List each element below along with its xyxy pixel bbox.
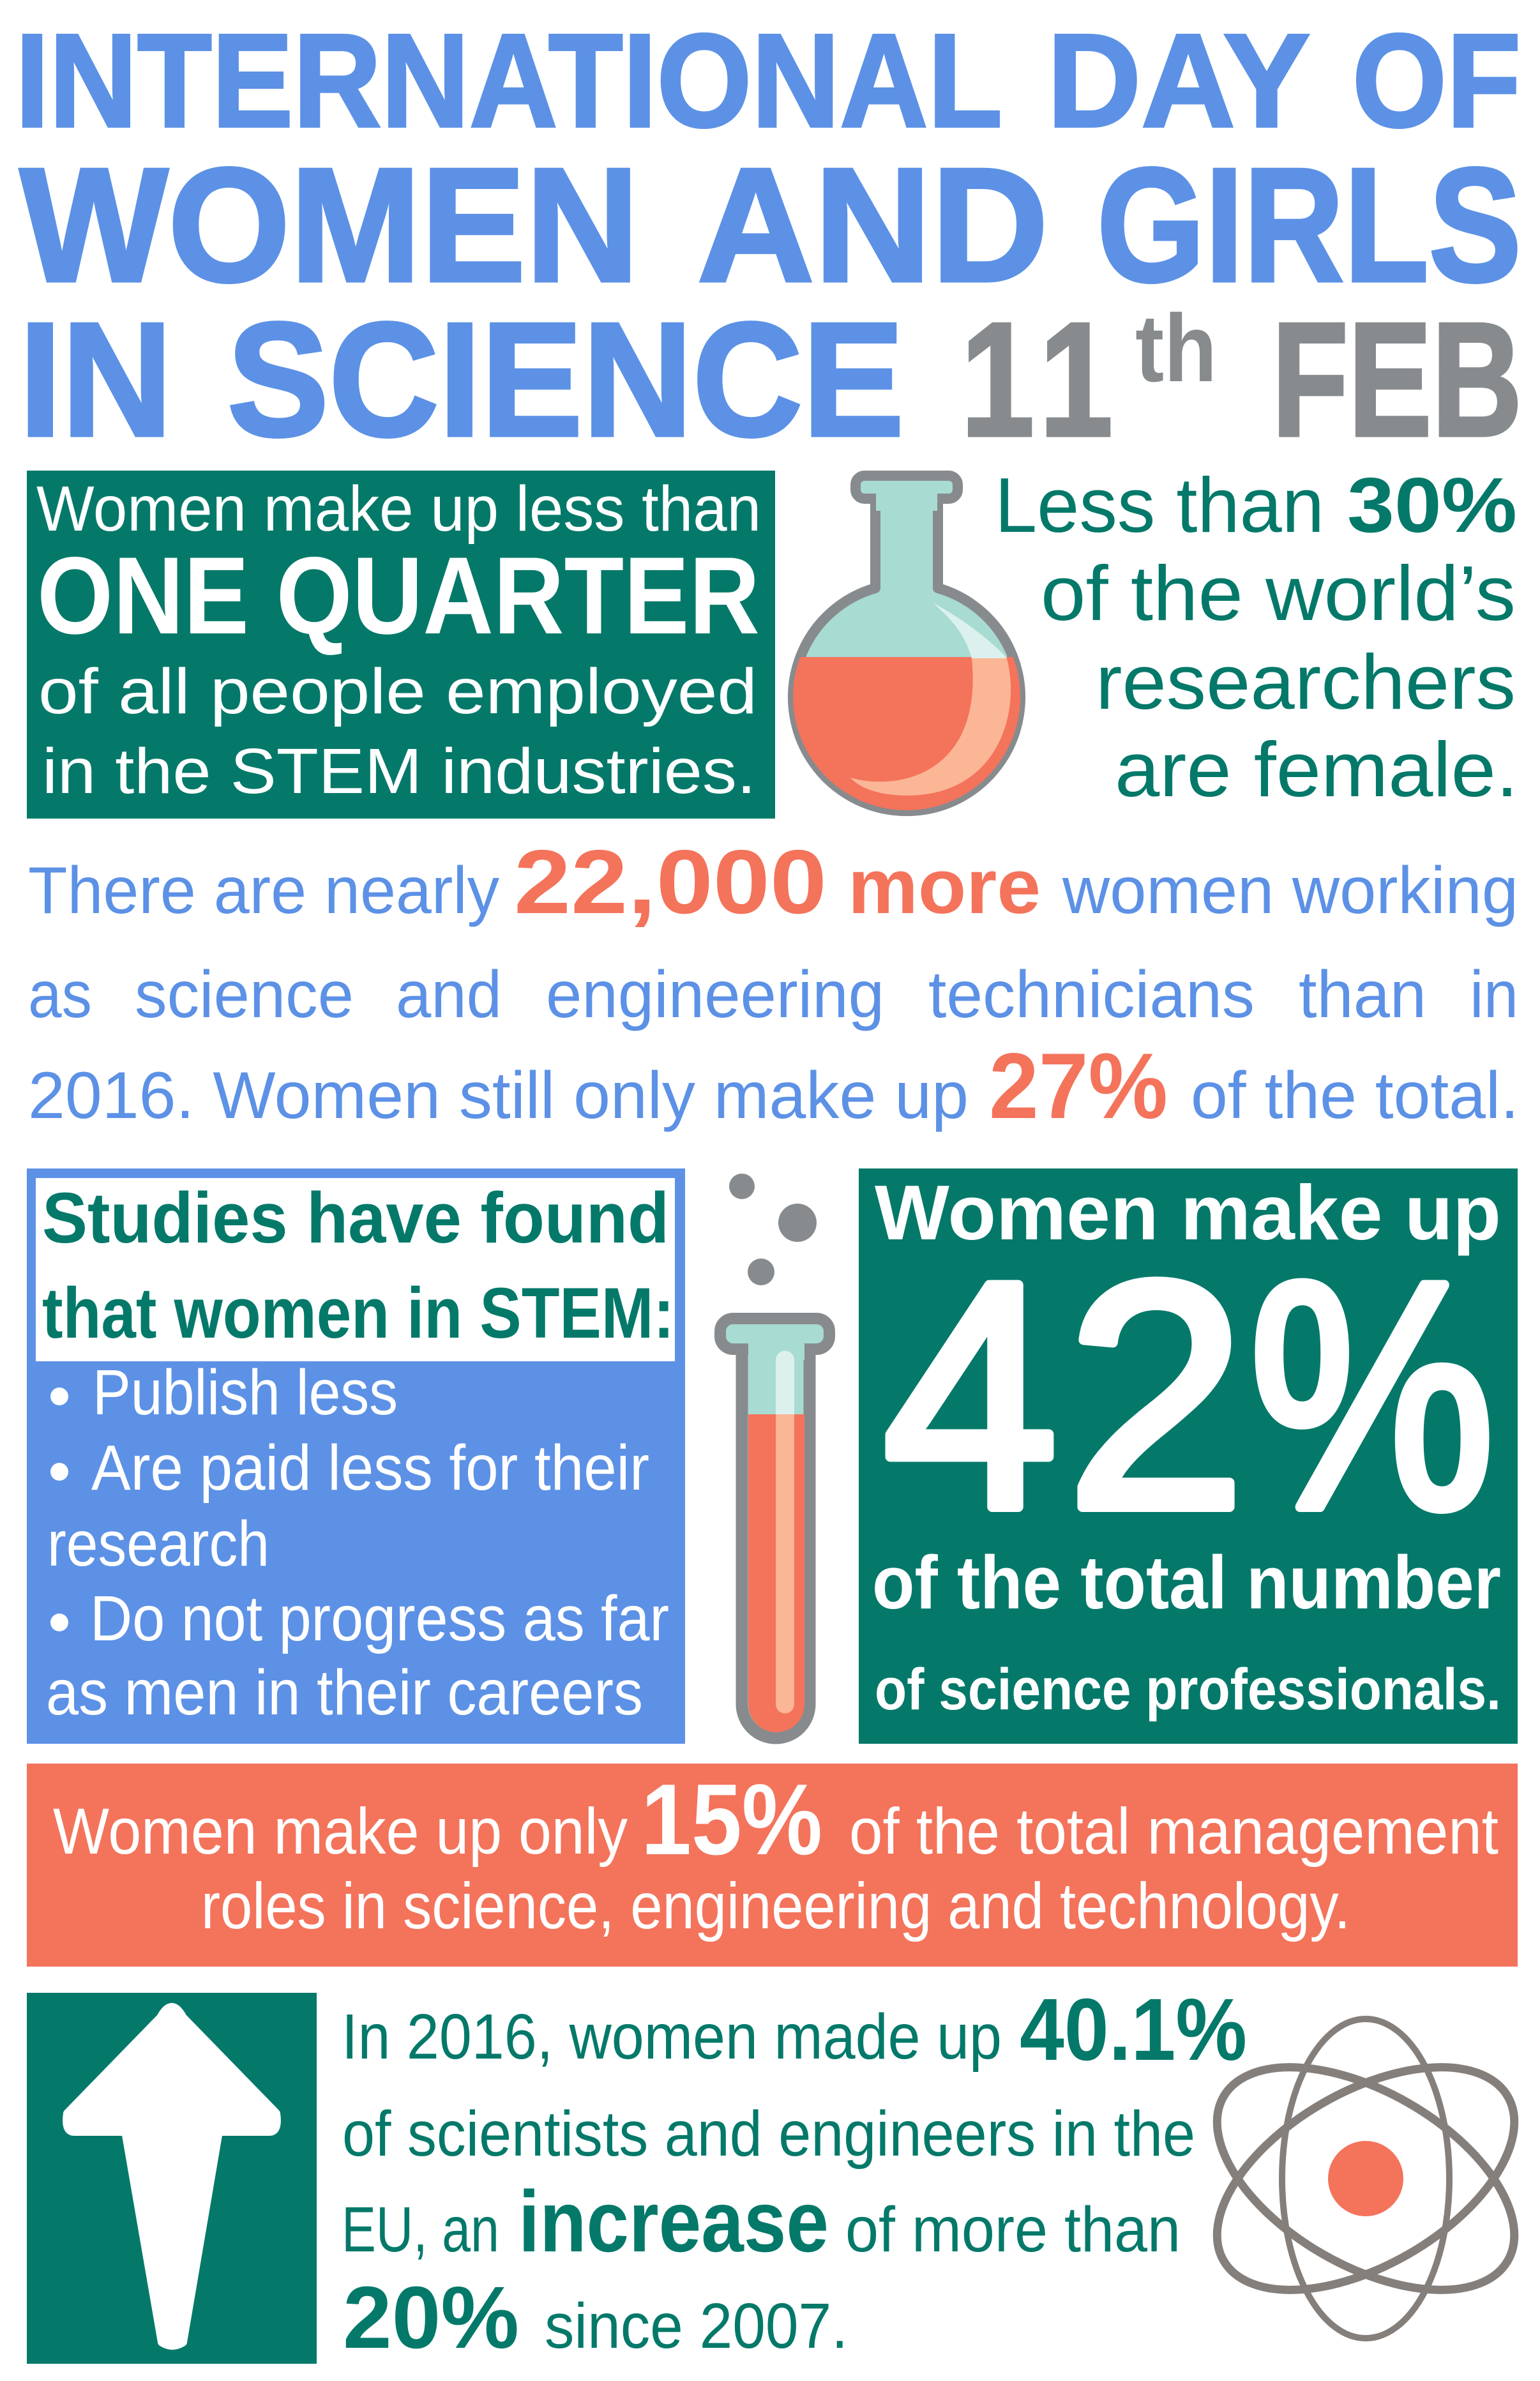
text: EU increase: In 2016, women made up — [342, 2001, 1002, 2073]
title: SCIENCE — [227, 289, 904, 470]
list: findings: Publish less — [93, 1357, 398, 1428]
text: 22,000 more technicians: 22,000 — [514, 831, 827, 933]
text: EU increase: 20% — [343, 2269, 519, 2367]
text: management statement: of the total management — [849, 1795, 1498, 1868]
text: EU increase: increase — [518, 2173, 829, 2270]
text: 22,000 more technicians: science — [135, 958, 354, 1032]
text: 22,000 more technicians: engineering — [546, 958, 884, 1032]
heading: studies — [42, 1178, 674, 1353]
icon: atom — [1180, 2019, 1540, 2338]
text: management statement: roles in science, engineering and technology. — [201, 1870, 1350, 1942]
title — [15, 7, 1521, 470]
date: 11th Feb: 1 — [961, 289, 1034, 470]
text: 22,000 more technicians: more — [848, 843, 1041, 930]
text: women make up 42% — [872, 1169, 1501, 1722]
title: WOMEN — [20, 134, 639, 315]
date: 11th Feb — [961, 289, 1522, 470]
date: 11th Feb: 1 — [1039, 289, 1113, 470]
text: EU increase: 40.1% — [1020, 1981, 1247, 2079]
panel: 42% — [859, 1168, 1518, 1744]
text: EU increase: since 2007. — [545, 2290, 848, 2362]
panel: studies have found — [27, 1168, 685, 1744]
text: women make up 42%: 2 — [1066, 1216, 1246, 1576]
text: 22,000 more technicians — [28, 831, 1519, 1138]
heading: studies: Studies have found — [42, 1178, 669, 1258]
text: less than 30% — [995, 462, 1518, 813]
title: DAY — [1047, 7, 1310, 155]
text: EU increase: of more than — [845, 2194, 1181, 2265]
text: women make up 42%: % — [1249, 1216, 1495, 1576]
text: EU increase: of scientists and engineers in the — [342, 2098, 1195, 2170]
text: 22,000 more technicians: as — [28, 958, 92, 1032]
text: management statement: Women make up only — [53, 1795, 628, 1868]
icon: up arrow — [67, 2007, 276, 2345]
text: 22,000 more technicians: women working — [1062, 854, 1518, 928]
text: 22,000 more technicians: and — [396, 958, 502, 1032]
text: one quarter statement — [36, 473, 761, 807]
text: management statement: 15% — [641, 1764, 822, 1876]
text: one quarter statement: of all people employed — [38, 656, 757, 727]
text: less than 30%: are female. — [1115, 726, 1518, 813]
text: women make up 42%: 4 — [883, 1216, 1058, 1576]
panel: 15% management — [27, 1764, 1518, 1967]
title: AND — [697, 134, 1048, 315]
text: less than 30%: researchers — [1096, 639, 1516, 725]
text: 22,000 more technicians: 2016. Women still only make up — [28, 1059, 969, 1133]
text: less than 30%: Less than — [995, 462, 1324, 548]
date: 11th Feb: th — [1135, 294, 1217, 402]
text: management statement — [53, 1764, 1498, 1942]
text: one quarter statement: in the STEM industries. — [42, 736, 756, 807]
text: one quarter statement: Women make up less than — [36, 473, 761, 545]
icon: flask — [793, 476, 1020, 817]
title: OF — [1352, 7, 1521, 155]
text: 22,000 more technicians: 27% — [989, 1034, 1168, 1138]
text: 22,000 more technicians: technicians — [928, 958, 1255, 1032]
text: EU increase — [342, 1981, 1247, 2367]
text: 22,000 more technicians: than — [1299, 958, 1426, 1032]
text: EU increase: EU, an — [342, 2194, 499, 2265]
panel: arrow — [27, 1993, 317, 2364]
list: findings: as men in their careers — [46, 1657, 643, 1728]
title: IN — [19, 289, 172, 470]
heading: studies: that women in STEM: — [42, 1273, 674, 1353]
title: INTERNATIONAL — [15, 7, 1002, 155]
list: findings: Do not progress as far — [90, 1583, 669, 1654]
icon: test tube with bubbles — [720, 1174, 829, 1738]
text: 22,000 more technicians: in — [1470, 958, 1518, 1032]
list: findings — [46, 1357, 669, 1728]
text: less than 30%: 30% — [1347, 462, 1517, 548]
text: one quarter statement: ONE QUARTER — [37, 534, 760, 657]
text: 22,000 more technicians: There are nearly — [28, 854, 499, 928]
text: women make up 42%: of the total number — [872, 1541, 1501, 1625]
text: women make up 42%: Women make up — [875, 1169, 1501, 1256]
list: findings: Are paid less for their — [91, 1432, 649, 1504]
text: less than 30%: of the world’s — [1041, 550, 1516, 637]
text: 22,000 more technicians: of the total. — [1191, 1059, 1519, 1133]
panel: one quarter — [27, 471, 775, 819]
list: findings: research — [47, 1508, 269, 1580]
